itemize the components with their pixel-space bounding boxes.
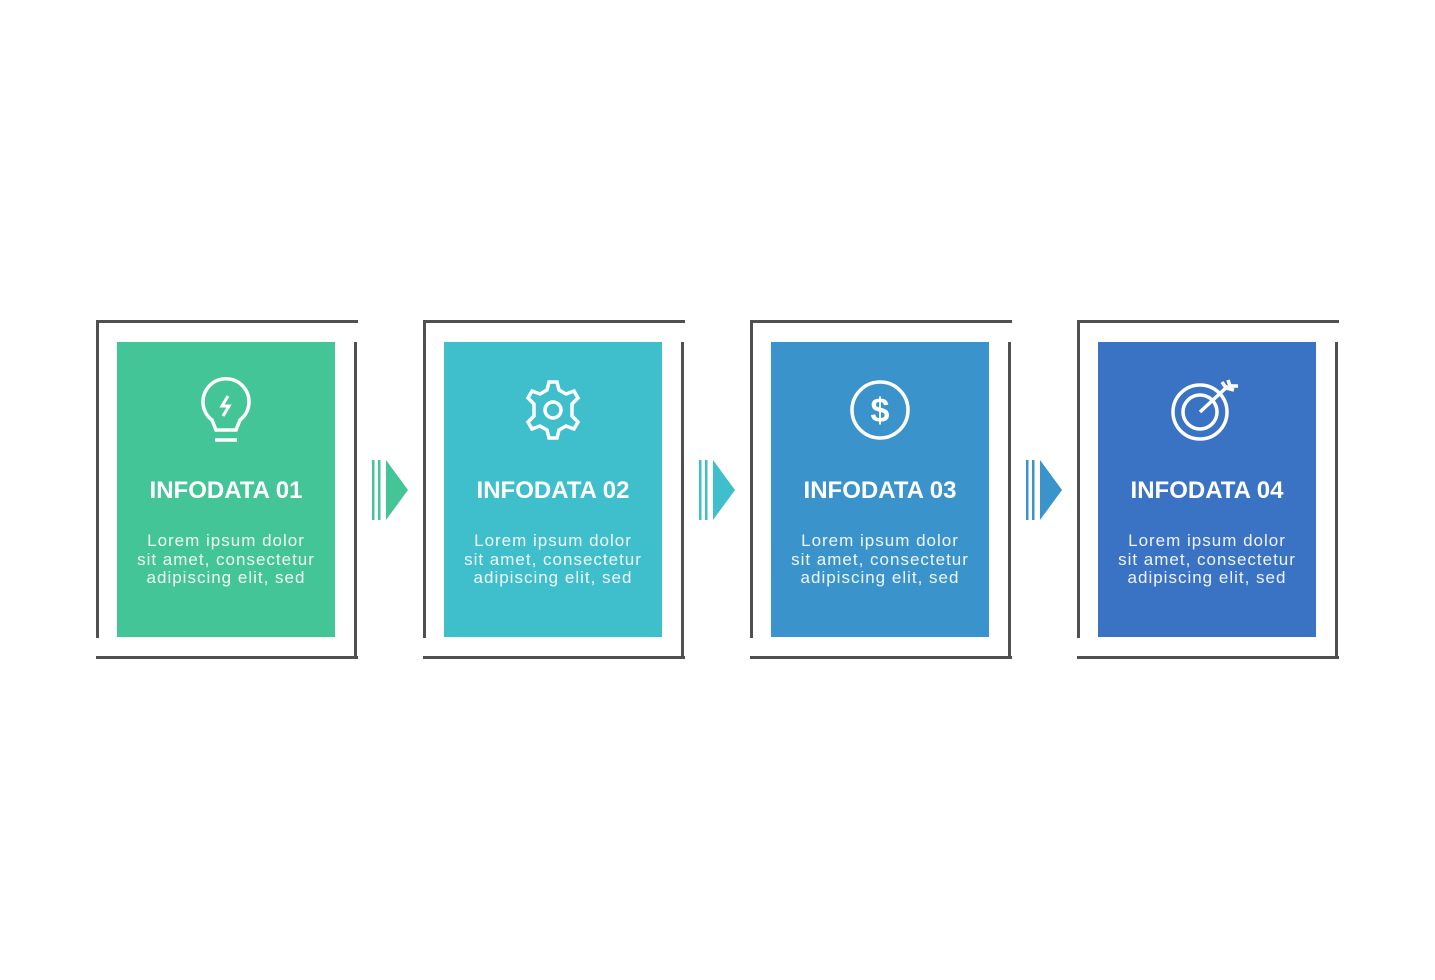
title: INFODATA 01	[150, 477, 302, 504]
icon: dollar coin: $	[871, 392, 890, 430]
icon: dollar coin	[850, 380, 910, 440]
text: adipiscing elit, sed	[147, 568, 305, 587]
text: adipiscing elit, sed	[474, 568, 632, 587]
text	[791, 531, 969, 587]
text: Lorem ipsum dolor	[147, 531, 305, 550]
arrow 3	[1026, 460, 1062, 520]
card 3	[771, 342, 989, 637]
text: Lorem ipsum dolor	[1128, 531, 1286, 550]
title: INFODATA 02	[477, 477, 629, 504]
icon: gear	[526, 380, 580, 440]
arrow 2	[699, 460, 735, 520]
text: sit amet, consectetur	[1118, 550, 1296, 568]
text	[137, 531, 315, 587]
text: adipiscing elit, sed	[1128, 568, 1286, 587]
text: sit amet, consectetur	[137, 550, 315, 568]
text: adipiscing elit, sed	[801, 568, 959, 587]
text	[464, 531, 642, 587]
title: INFODATA 03	[804, 477, 956, 504]
text: Lorem ipsum dolor	[801, 531, 959, 550]
text: sit amet, consectetur	[791, 550, 969, 568]
card 1	[117, 342, 335, 637]
card 2	[444, 342, 662, 637]
step 4	[1077, 320, 1339, 659]
text: sit amet, consectetur	[464, 550, 642, 568]
arrow 1	[372, 460, 408, 520]
step 3	[750, 320, 1012, 659]
icon: light bulb	[201, 377, 251, 442]
text	[1118, 531, 1296, 587]
icon: target	[1171, 380, 1238, 441]
text: Lorem ipsum dolor	[474, 531, 632, 550]
step 2	[423, 320, 685, 659]
step 1	[96, 320, 358, 659]
card 4	[1098, 342, 1316, 637]
title: INFODATA 04	[1131, 477, 1283, 504]
